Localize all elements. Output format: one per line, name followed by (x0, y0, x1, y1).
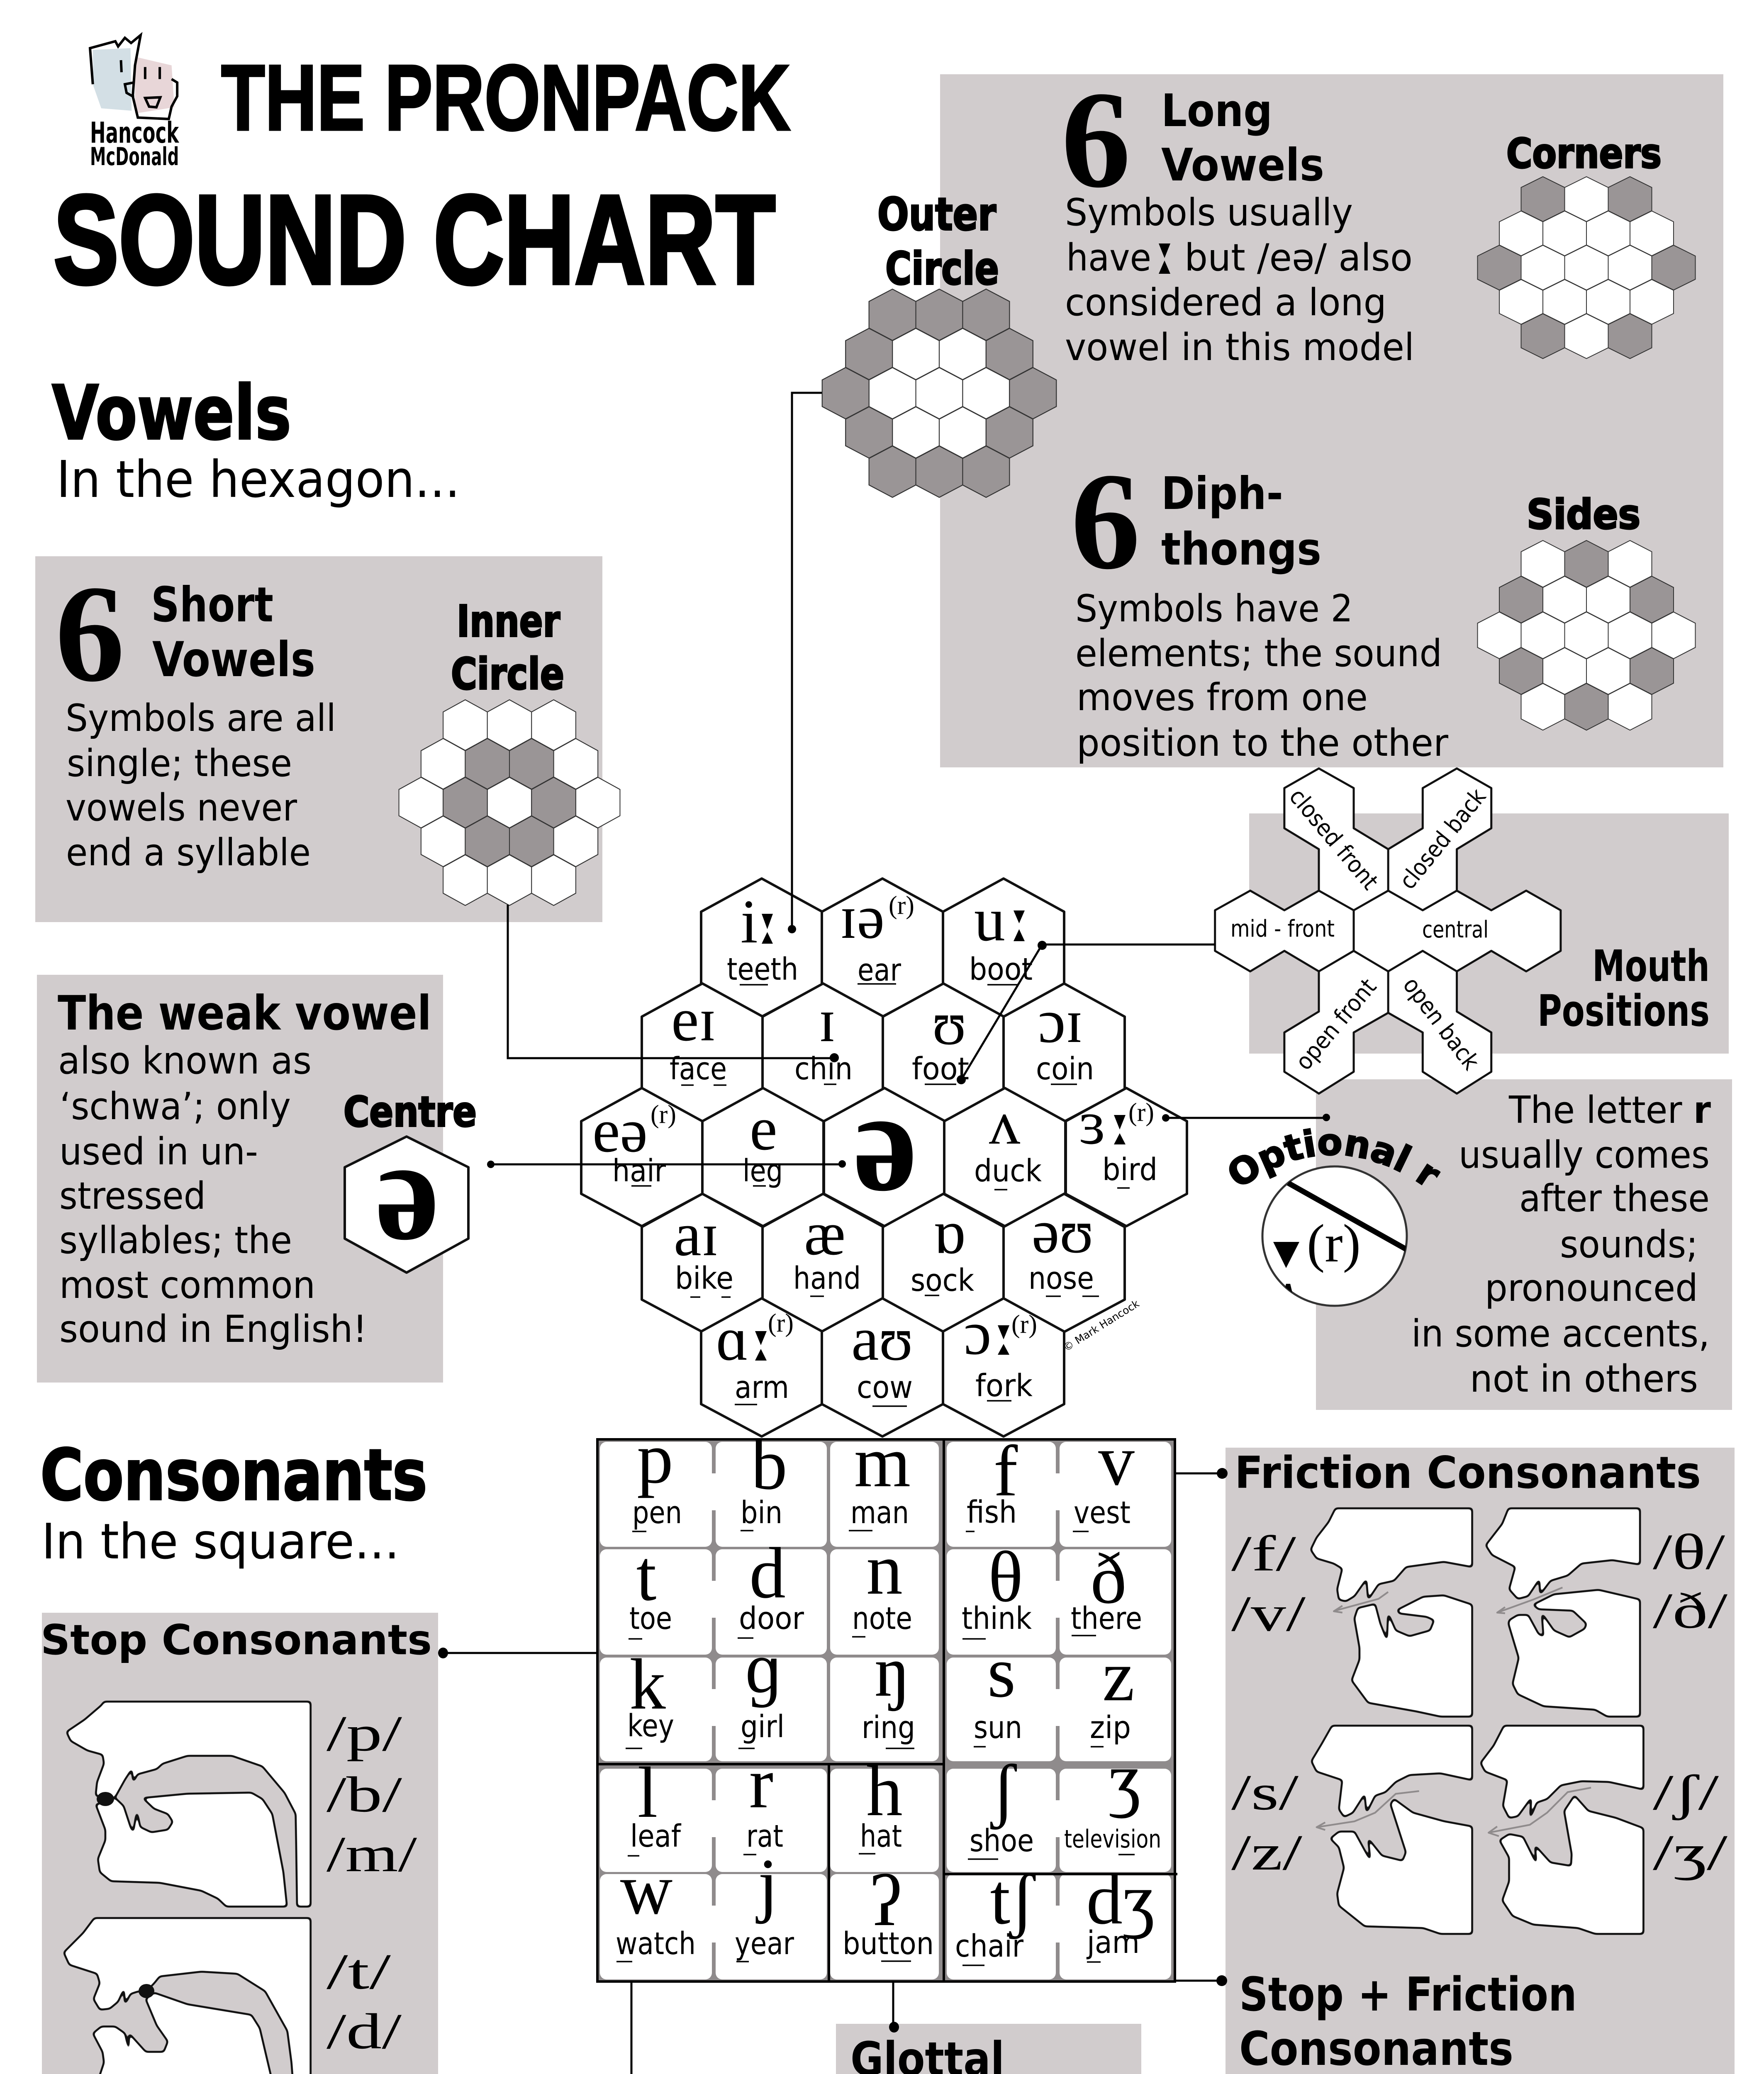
text block: 6 long vowels: considered a long (1065, 281, 1386, 324)
vowel cell: foot: foot (912, 1051, 969, 1087)
vowel cell: fork: (r) (1011, 1310, 1037, 1339)
consonant cell: bin (716, 1424, 827, 1547)
outer circle heading (877, 189, 999, 295)
sides heading: Sides (1527, 491, 1640, 538)
vowel cell: leg (702, 1088, 824, 1226)
subheading: in the hexagon: In the hexagon... (56, 450, 460, 509)
consonant cell: fish: f (994, 1431, 1018, 1511)
consonant cell: man: man (850, 1495, 909, 1531)
connector: vowel-like consonants (627, 1981, 637, 2074)
consonant cell: shoe: ʃ (990, 1749, 1017, 1830)
friction consonant labels: /ʒ/ (1653, 1825, 1727, 1881)
text block: optional r: pronounced (1485, 1266, 1698, 1310)
outer circle heading: Outer (877, 189, 996, 241)
vowel cell: duck: duck (974, 1153, 1042, 1189)
mouth positions diagram: closed back (1394, 783, 1491, 895)
consonant cell: vest (1060, 1420, 1171, 1547)
consonant cell: door: door (739, 1601, 804, 1636)
vowel cell: boot (943, 879, 1064, 1017)
text block: 6 long vowels: Symbols usually (1065, 191, 1353, 234)
consonant cell: fish (947, 1431, 1056, 1547)
consonant cell: television (1060, 1738, 1171, 1872)
consonant cell: rat (716, 1743, 827, 1872)
title: Sound Chart: SOUND CHART (54, 169, 775, 310)
vowel cell: arm (701, 1298, 822, 1436)
consonant cell: vest: v (1098, 1420, 1135, 1500)
mouth positions diagram: closed front (1284, 783, 1384, 895)
text block: optional r: after these (1519, 1177, 1710, 1220)
mouth positions heading (1537, 941, 1710, 1036)
vowel cell: fork: fork (975, 1368, 1033, 1404)
text block: 6 long vowels: ː (1158, 230, 1171, 280)
consonant cell: zip (1060, 1636, 1171, 1761)
consonant cell: sun: sun (974, 1710, 1022, 1745)
stop consonant labels: /p/ (326, 1706, 402, 1762)
hexagon key: centre schwa (345, 1109, 468, 1273)
vowel hexagon chart (581, 879, 1187, 1436)
consonant cell: bin: b (751, 1424, 787, 1504)
vowel cell: bike: bike (675, 1261, 733, 1296)
diagram: f v (1311, 1509, 1472, 1716)
text block: optional r: The letter r (1508, 1088, 1711, 1132)
vowel cell: coin (1004, 983, 1125, 1122)
consonant cell: toe: t (636, 1535, 656, 1616)
consonant cell: year: year (735, 1926, 794, 1962)
panel: weak vowel (37, 975, 443, 1383)
connector: glottal consonants (889, 1981, 899, 2033)
consonant cell: think: think (962, 1601, 1032, 1636)
consonant cell: ring: ŋ (875, 1631, 910, 1711)
vowel cell: nose (1004, 1194, 1125, 1332)
text: McDonald (90, 142, 179, 171)
vowel cell: ear: ɪə (840, 883, 884, 952)
vowel cell: chin: ɪ (819, 986, 836, 1055)
vowel cell: sock (883, 1194, 1004, 1332)
vowel cell: boot: boot (969, 952, 1033, 987)
vowel cell: sock: ɒ (933, 1198, 965, 1267)
panel: glottal consonants (836, 2024, 1141, 2074)
diagram: sh zh (1481, 1726, 1643, 1934)
consonant cell: note (830, 1529, 939, 1655)
vowel cell: bike (642, 1194, 763, 1332)
text block: optional r (1411, 1088, 1711, 1401)
vowel cell: leg: e (750, 1094, 777, 1163)
consonant cell: note: note (852, 1601, 912, 1636)
text block: 6 short vowels: single; these (67, 742, 292, 785)
vowel cell: schwa: ə (853, 1060, 918, 1221)
text block: 6 short vowels: Symbols are all (66, 696, 336, 740)
text block: 6 long vowels: Vowels (1161, 139, 1324, 191)
vowel cell: coin: ɔɪ (1038, 987, 1083, 1056)
consonant cell: shoe (947, 1749, 1056, 1872)
stop consonant labels: /d/ (326, 2003, 402, 2059)
connector: bird to optional r (1162, 1114, 1330, 1122)
text block: 6 long vowels: Long (1161, 85, 1272, 137)
text block: optional r: sounds; (1560, 1223, 1698, 1266)
consonant cell: man (830, 1422, 939, 1547)
diagram: lips stop (66, 1702, 310, 1906)
consonant cell: sun (947, 1632, 1056, 1761)
heading: Consonants: Consonants (40, 1434, 427, 1517)
text block: 6 diphthongs: moves from one (1077, 676, 1368, 719)
text block: the weak vowel: most common (59, 1263, 315, 1307)
mouth positions diagram: open front (1290, 974, 1382, 1075)
vowel cell: chin: chin (794, 1051, 853, 1087)
stop consonant labels: /m/ (326, 1826, 417, 1882)
vowel cell: arm: arm (735, 1370, 789, 1405)
consonant cell: watch: watch (616, 1926, 696, 1962)
vowel cell: arm: (r) (768, 1309, 794, 1337)
vowel cell: fork (943, 1298, 1064, 1436)
vowel cell: hair: eə (592, 1096, 648, 1165)
text block: the weak vowel: also known as (58, 1039, 312, 1083)
vowel cell: cow (822, 1298, 943, 1436)
optional r curved heading: Optional r (1220, 1120, 1448, 1197)
vowel cell: bird (1066, 1088, 1187, 1226)
hexagon key: centre schwa: ə (375, 1109, 440, 1270)
connector: centre to schwa (487, 1160, 846, 1168)
panel: short vowels (35, 556, 602, 922)
vowel cell: cow: aʊ (851, 1305, 913, 1373)
vowel cell: leg: leg (743, 1153, 783, 1189)
vowel cell: ear: ear (858, 952, 901, 988)
consonant cell: button: ʔ (870, 1860, 902, 1941)
panel: mouth positions (1249, 813, 1729, 1054)
connector: inner circle to chin (508, 905, 839, 1062)
corners heading: Corners (1506, 130, 1662, 178)
friction consonant labels: /s/ (1231, 1765, 1299, 1821)
consonant cell: bin: bin (741, 1495, 782, 1531)
text block: the weak vowel: syllables; the (59, 1219, 292, 1262)
inner circle heading: Inner (457, 596, 560, 647)
consonant cell: pen: p (637, 1418, 673, 1498)
vowel cell: hair (581, 1088, 702, 1226)
consonant cell: fish: fish (967, 1495, 1017, 1530)
consonant cell: there: there (1071, 1601, 1142, 1636)
consonant cell: girl (716, 1627, 827, 1761)
text block: 6 diphthongs: Symbols have 2 (1075, 587, 1353, 630)
consonant cell: shoe: shoe (970, 1823, 1034, 1859)
stop plus friction heading (1239, 1968, 1577, 2074)
text block: the weak vowel: The weak vowel (58, 986, 431, 1041)
diagram: s z (1311, 1726, 1472, 1934)
vowel cell: bird: (r) (1128, 1098, 1154, 1127)
consonant cell: leaf: leaf (630, 1818, 682, 1854)
connector: outer circle to teeth (788, 393, 822, 933)
connector: stop plus friction consonants (1175, 1975, 1227, 1986)
consonant cell: rat: rat (746, 1818, 783, 1854)
vowel cell: nose: əʊ (1032, 1197, 1094, 1266)
text block: 6 diphthongs: Diph- (1161, 468, 1283, 520)
friction consonant labels: /ʃ/ (1653, 1765, 1719, 1821)
vowel cell: hair: hair (612, 1153, 666, 1189)
consonant cell: key (600, 1644, 712, 1761)
text block: 6 diphthongs: 6 (1071, 444, 1140, 598)
vowel cell: duck (944, 1088, 1065, 1226)
consonant cell: year (716, 1844, 827, 1979)
consonant cell: vest: vest (1074, 1495, 1131, 1531)
text block: 6 short vowels: Short (151, 577, 273, 633)
vowel cell: duck: ʌ (989, 1088, 1020, 1157)
vowel cell: boot: uː (974, 885, 1028, 954)
consonant cell: zip: z (1102, 1636, 1135, 1716)
text block: 6 diphthongs: position to the other (1077, 721, 1448, 765)
text block: optional r: not in others (1470, 1357, 1698, 1401)
text block: 6 long vowels: vowel in this model (1065, 326, 1414, 369)
consonant cell: hat: hat (860, 1818, 902, 1854)
consonant cell: year: j (755, 1844, 778, 1924)
consonant cell: door (716, 1533, 827, 1655)
vowel cell: bird: ɜː (1079, 1088, 1128, 1157)
vowel cell: fork: ɔː (964, 1299, 1012, 1368)
text block: optional r: in some accents, (1411, 1312, 1710, 1356)
text block: the weak vowel: stressed (59, 1174, 206, 1218)
text block: 6 short vowels: end a syllable (66, 831, 311, 874)
consonant cell: button: button (843, 1926, 934, 1962)
friction consonants heading: Friction Consonants (1235, 1447, 1701, 1498)
text block: 6 long vowels: have (1066, 236, 1151, 280)
connector: mouth positions to boot and foot (957, 941, 1215, 1084)
vowel cell: face: face (670, 1051, 727, 1087)
vowel cell: coin: coin (1036, 1051, 1094, 1087)
vowel cell: foot: ʊ (932, 989, 966, 1058)
copyright note: © Mark Hancock (1061, 1297, 1142, 1354)
friction consonant labels: /v/ (1231, 1586, 1306, 1642)
consonant cell: note: n (866, 1529, 903, 1609)
vowel cell: ear (822, 879, 943, 1017)
text block: the weak vowel: ‘schwa’; only (60, 1085, 291, 1128)
mouth positions diagram (1215, 769, 1561, 1093)
logo: Hancock McDonald (90, 35, 179, 171)
consonant cell: leaf (600, 1752, 712, 1872)
outer circle heading: Circle (885, 243, 999, 295)
friction consonant labels: /θ/ (1653, 1524, 1725, 1580)
vowel cell: face: eɪ (671, 985, 716, 1054)
vowel cell: hair: (r) (651, 1100, 676, 1129)
diagram: tongue tip stop (64, 1918, 310, 2074)
text block: 6 long vowels (1061, 63, 1414, 369)
consonant cell: there (1060, 1538, 1171, 1655)
vowel cell: nose: nose (1028, 1261, 1094, 1296)
consonant cell: ring: ring (862, 1710, 915, 1745)
consonant cell: think: θ (988, 1536, 1023, 1617)
consonant cell: television: television (1064, 1825, 1161, 1854)
vowel cell: teeth: teeth (727, 952, 798, 987)
vowel cell: bird: bird (1102, 1152, 1157, 1188)
text: Hancock (90, 116, 179, 150)
mouth positions heading: Positions (1537, 986, 1710, 1036)
text block: 6 short vowels: Vowels (152, 632, 315, 688)
inner circle heading (451, 596, 564, 699)
stop consonant labels: /t/ (326, 1944, 391, 2000)
consonant cell: jam (1060, 1859, 1171, 1979)
text block: the weak vowel: used in un- (59, 1130, 258, 1173)
consonant cell: girl: girl (741, 1709, 785, 1745)
vowel cell: ear: (r) (889, 891, 914, 920)
text block: 6 diphthongs (1071, 444, 1448, 765)
subheading: in the square: In the square... (41, 1513, 400, 1570)
vowel cell: schwa (824, 1060, 945, 1226)
text block: 6 long vowels: but /eə/ also (1184, 236, 1413, 280)
consonant cell: sun: s (987, 1632, 1016, 1712)
consonant square chart (597, 1418, 1177, 1981)
vowel cell: sock: sock (911, 1263, 974, 1298)
mouth positions diagram: mid - front (1230, 915, 1335, 942)
consonant cell: watch (600, 1849, 712, 1979)
hexagon key: inner circle (399, 700, 620, 906)
panel: stop consonants (42, 1613, 438, 2074)
consonant cell: leaf: l (638, 1752, 658, 1833)
centre heading: Centre (344, 1088, 477, 1136)
connector: friction consonants (1175, 1468, 1228, 1479)
text block: 6 short vowels: vowels never (66, 786, 297, 830)
consonant cell: think (947, 1536, 1056, 1655)
mouth positions heading: Mouth (1592, 941, 1710, 991)
consonant cell: girl: ɡ (745, 1627, 782, 1708)
stop consonants heading: Stop Consonants (41, 1616, 432, 1664)
text block: 6 diphthongs: elements; the sound (1075, 632, 1442, 675)
consonant cell: zip: zip (1090, 1710, 1131, 1745)
hexagon key: outer circle (822, 289, 1056, 497)
vowel cell: chin (763, 983, 884, 1122)
inner circle heading: Circle (451, 649, 564, 699)
icon: optional r magnifier: (r) (1307, 1214, 1361, 1273)
consonant cell: television: ʒ (1109, 1738, 1141, 1818)
friction consonant labels: /ð/ (1653, 1583, 1727, 1639)
text block: 6 short vowels: 6 (55, 557, 124, 711)
friction consonant labels: /z/ (1231, 1825, 1302, 1881)
panel: friction consonants (1226, 1448, 1735, 2074)
mouth positions diagram: open back (1398, 972, 1485, 1075)
consonant cell: key: key (627, 1708, 674, 1744)
consonant cell: chair: tʃ (990, 1859, 1036, 1939)
consonant cell: pen (600, 1418, 712, 1547)
vowel cell: foot (883, 983, 1004, 1122)
consonant cell: chair (947, 1859, 1056, 1979)
friction consonant labels: /f/ (1231, 1526, 1296, 1582)
consonant cell: toe (600, 1535, 712, 1655)
consonant cell: door: d (749, 1533, 786, 1613)
friction consonant labels (1231, 1524, 1727, 1881)
title: The Pronpack: THE PRONPACK (221, 45, 790, 150)
consonant cell: hat (830, 1750, 939, 1872)
vowel cell: hand: hand (793, 1261, 861, 1296)
vowel cell: arm: ɑː (716, 1305, 771, 1373)
text block: 6 long vowels: 6 (1061, 63, 1131, 217)
stop consonant labels: /b/ (326, 1767, 402, 1823)
consonant cell: ring (830, 1631, 939, 1761)
panel: long vowels and diphthongs (940, 74, 1723, 767)
text block: optional r: usually comes (1459, 1133, 1710, 1177)
connector: stop consonants (438, 1648, 597, 1658)
hexagon key: corners (1478, 177, 1695, 358)
consonant cell: hat: h (866, 1750, 903, 1831)
mouth positions diagram: central (1422, 916, 1489, 943)
text block: the weak vowel (58, 986, 431, 1351)
stop plus friction heading: Stop + Friction (1239, 1968, 1577, 2022)
panel: optional r (1316, 1079, 1732, 1410)
vowel cell: bike: aɪ (674, 1200, 719, 1269)
consonant cell: button (830, 1860, 939, 1979)
consonant cell: jam: jam (1086, 1925, 1140, 1960)
consonant cell: key: k (629, 1644, 666, 1724)
hexagon key: sides (1478, 540, 1695, 730)
consonant cell: jam: dʒ (1086, 1859, 1155, 1939)
text block: 6 diphthongs: thongs (1161, 523, 1321, 575)
consonant cell: chair: chair (955, 1928, 1024, 1964)
consonant cell: toe: toe (629, 1601, 672, 1636)
vowel cell: teeth (701, 879, 822, 1017)
text block: the weak vowel: sound in English! (59, 1307, 367, 1351)
consonant cell: there: ð (1090, 1538, 1127, 1619)
heading: Vowels: Vowels (52, 370, 291, 457)
consonant cell: rat: r (749, 1743, 773, 1823)
icon: optional r magnifier (1262, 1166, 1407, 1306)
vowel cell: hand: æ (804, 1199, 845, 1268)
vowel cell: teeth: iː (741, 887, 775, 956)
vowel cell: hand (763, 1194, 884, 1332)
text block: 6 short vowels (55, 557, 336, 874)
consonant cell: man: m (854, 1422, 911, 1502)
stop consonant labels (326, 1706, 417, 2074)
consonant cell: pen: pen (632, 1495, 682, 1531)
diagram: theta eth (1486, 1509, 1640, 1716)
vowel cell: face (642, 983, 763, 1122)
vowel cell: cow: cow (857, 1370, 913, 1405)
consonant cell: watch: w (620, 1849, 672, 1929)
